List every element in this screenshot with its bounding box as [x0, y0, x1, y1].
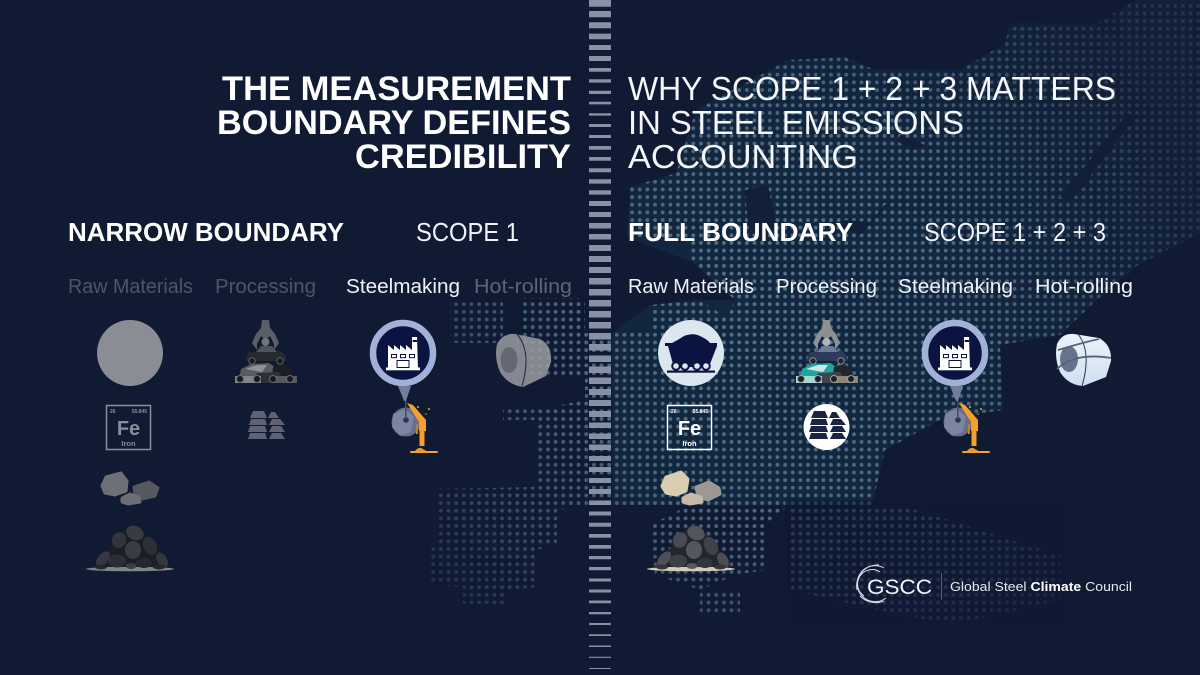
column labels: narrow boundary: Raw Materials: [68, 275, 193, 298]
icon: ladle full: [944, 386, 990, 453]
column labels: narrow boundary: Processing: [215, 275, 316, 298]
icon: Fe element: Iron: [682, 439, 697, 448]
column labels: full boundary: Steelmaking: [898, 275, 1013, 298]
column labels: narrow boundary: Steelmaking: [346, 275, 460, 298]
logo: [857, 565, 1132, 603]
icon: gray Fe element: 26: [110, 409, 116, 415]
icon: scrap cars: [796, 320, 858, 383]
icon: gray scrap: [235, 320, 297, 383]
icon: coal wagon: [658, 320, 724, 386]
icon: white coil: [1056, 334, 1111, 386]
icon: gray coal pile: [86, 523, 174, 571]
column labels: full boundary: Processing: [776, 275, 877, 298]
icon: factory narrow: [373, 323, 433, 383]
icon: ladle narrow: [392, 386, 438, 453]
title: right: [628, 71, 1116, 176]
dotted world map: [431, 4, 1200, 624]
icon: Fe element: 26: [671, 409, 677, 415]
icon: ingots: [804, 404, 850, 450]
title: right: ACCOUNTING: [628, 139, 858, 176]
icon: Fe element: [668, 406, 712, 450]
icon: gray Fe element: Iron: [121, 439, 136, 448]
logo: GSCC: [867, 575, 932, 599]
icon: gray Fe element: 55.845: [132, 409, 147, 415]
column labels: narrow boundary: Hot-rolling: [474, 275, 572, 298]
icon: Fe element: 55.845: [693, 409, 708, 415]
icon: gray raw material disc: [97, 320, 163, 386]
icon: gray stones: [102, 473, 158, 504]
column labels: full boundary: Raw Materials: [628, 275, 754, 298]
logo: Global Steel Climate Council: [950, 579, 1132, 594]
column labels: full boundary: [628, 275, 1133, 298]
icon: gray Fe element: Fe: [117, 418, 140, 440]
icon: coal pile: [647, 523, 735, 571]
heading: full boundary: FULL BOUNDARY: [628, 217, 853, 247]
title: left: THE MEASUREMENT: [222, 70, 571, 108]
heading: scope 1: SCOPE 1: [416, 217, 519, 247]
heading: narrow boundary: NARROW BOUNDARY: [68, 217, 344, 247]
title: right: IN STEEL EMISSIONS: [628, 105, 964, 142]
column labels: narrow boundary: [68, 275, 572, 298]
icon: gray Fe element: [106, 406, 150, 450]
heading: scope 1 + 2 + 3: SCOPE 1 + 2 + 3: [924, 217, 1106, 247]
column labels: full boundary: Hot-rolling: [1035, 275, 1133, 298]
icon: factory full: [925, 323, 985, 383]
title: left: BOUNDARY DEFINES: [217, 104, 571, 142]
title: right: WHY SCOPE 1 + 2 + 3 MATTERS: [628, 71, 1116, 108]
center divider: [589, 0, 611, 669]
title: left: CREDIBILITY: [355, 138, 571, 176]
title: left: [217, 70, 571, 176]
icon: Fe element: Fe: [678, 418, 701, 440]
icon: limestone: [662, 472, 720, 504]
icon: gray coil: [496, 334, 551, 387]
icon: gray ingots: [248, 411, 285, 439]
